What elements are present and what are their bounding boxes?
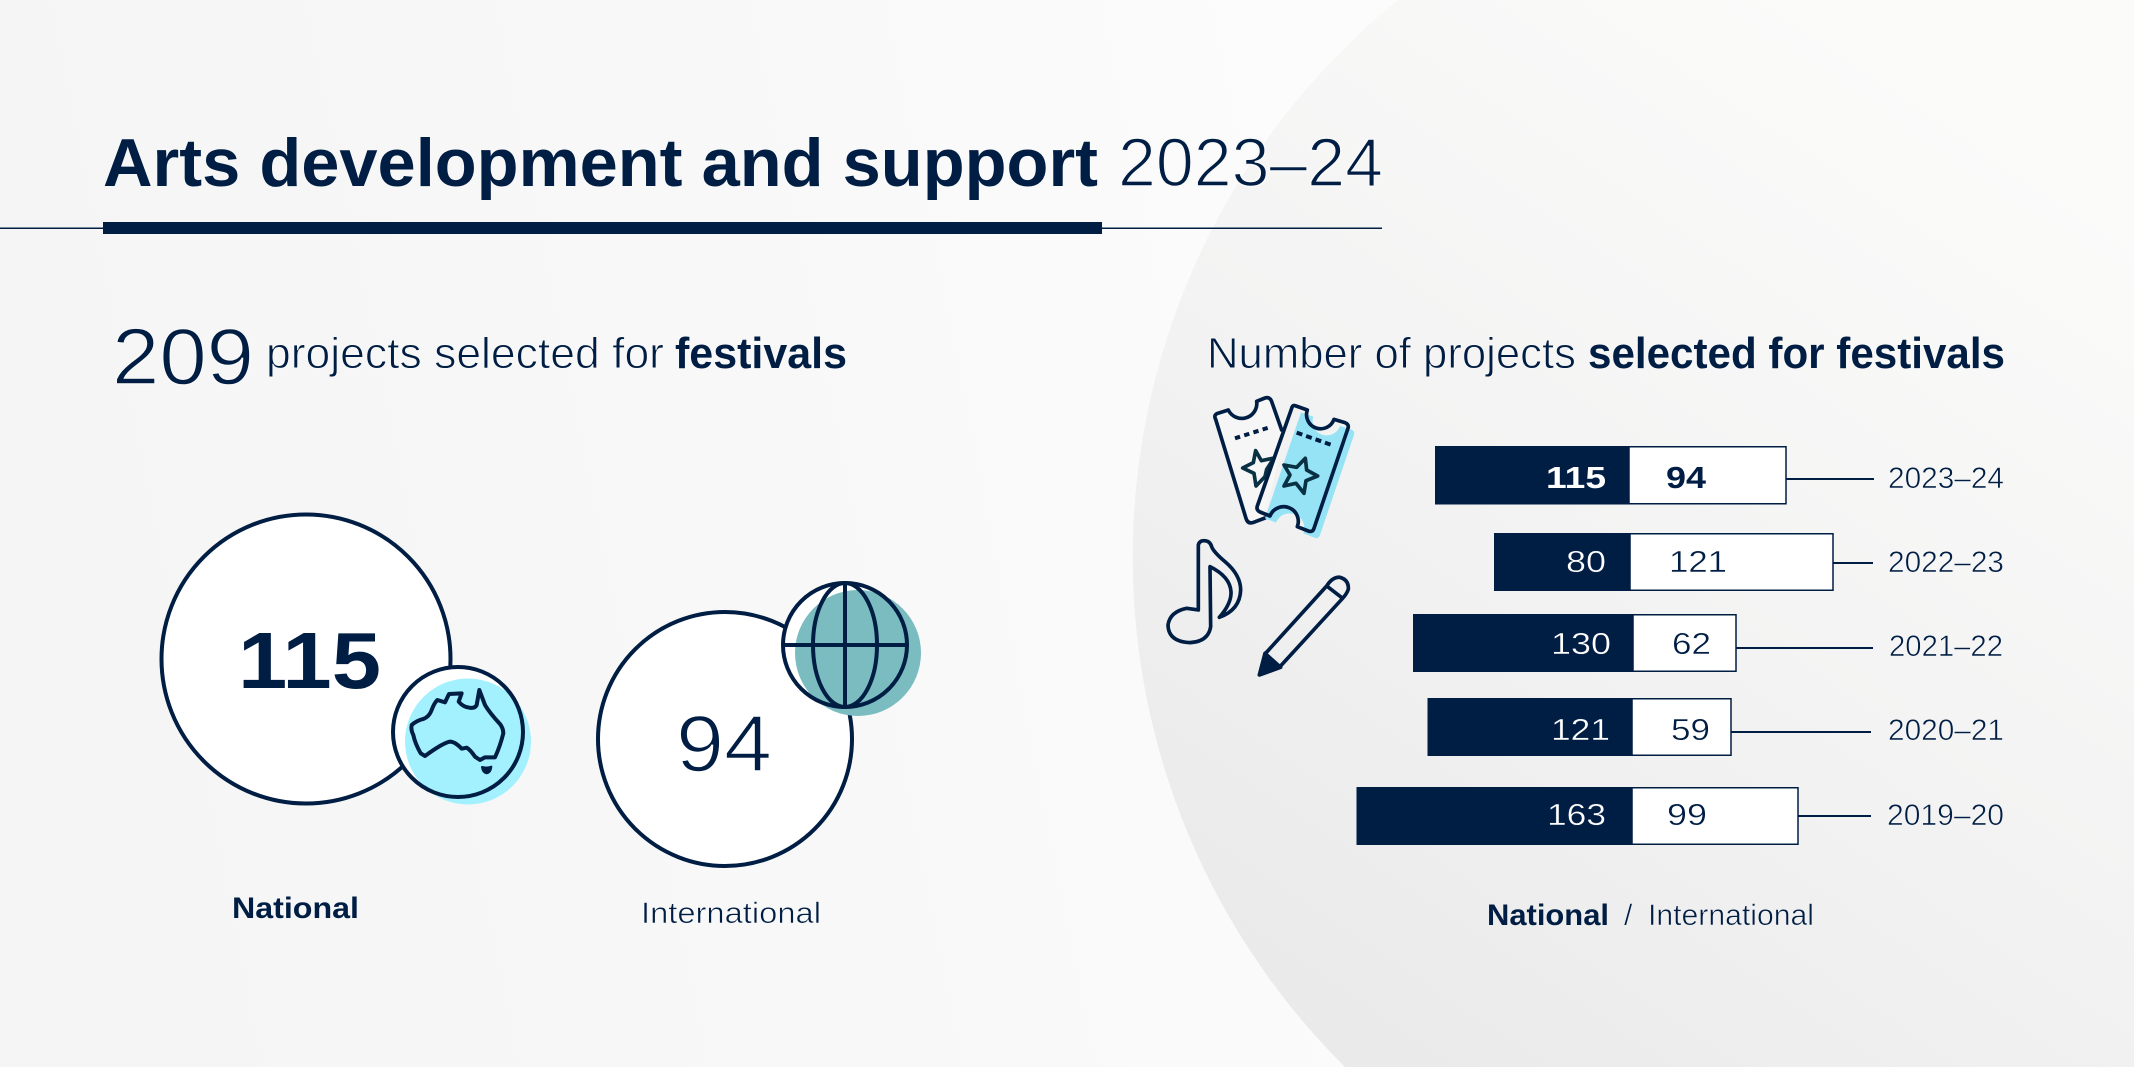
icon: globe — [783, 583, 921, 716]
icon: Australia map — [393, 667, 531, 804]
heading: 209 projects selected for festivals — [112, 312, 847, 401]
bar: 2020–21: 59 — [1671, 712, 1710, 747]
circle: national 115: 115 — [238, 616, 381, 705]
bar chart — [1356, 446, 2004, 845]
bar: 2019–20: 99 — [1667, 797, 1707, 832]
bar: 2020–21 — [1428, 698, 2004, 756]
bar: 2022–23: 80 — [1566, 544, 1606, 579]
panel: festival projects total and split — [112, 312, 921, 930]
bar: 2020–21: 121 — [1551, 712, 1610, 747]
bar: 2022–23: 2022–23 — [1888, 546, 2004, 579]
title: 2023–24 — [1118, 124, 1383, 201]
heading: 209 projects selected for festivals: 209 — [112, 312, 254, 401]
bar: 2021–22: 2021–22 — [1889, 630, 2003, 663]
bar: 2021–22: 130 — [1551, 626, 1611, 661]
icon: tickets — [1215, 398, 1354, 538]
icon: pencil — [1259, 577, 1348, 675]
heading: Number of projects selected for festivals: Number of projects — [1207, 329, 1576, 378]
legend: National / International: National — [1487, 899, 1609, 932]
bar: 2019–20: 2019–20 — [1887, 799, 2004, 832]
panel: number of projects chart — [1168, 329, 2005, 932]
label: National: National — [232, 892, 359, 925]
heading: Number of projects selected for festivals — [1207, 329, 2005, 378]
circle: national 115 — [162, 514, 450, 804]
legend: National / International — [1487, 899, 1814, 932]
title: Arts development and support — [103, 125, 1098, 201]
label: International: International — [641, 897, 821, 930]
bar: 2021–22: 62 — [1672, 626, 1711, 661]
bar: 2021–22 — [1413, 614, 2003, 672]
heading: 209 projects selected for festivals: projects selected for — [266, 329, 664, 378]
heading: 209 projects selected for festivals: festivals — [675, 329, 847, 378]
icon: music note — [1168, 541, 1241, 643]
circle: international 94 — [598, 612, 852, 866]
bar: 2023–24 — [1435, 446, 2004, 504]
legend: National / International: International — [1648, 899, 1814, 932]
bar: 2023–24: 2023–24 — [1888, 462, 2004, 495]
legend: National / International: / — [1624, 899, 1633, 932]
bar: 2019–20: 163 — [1547, 797, 1606, 832]
bar: 2022–23: 121 — [1669, 544, 1727, 579]
circle: international 94: 94 — [676, 699, 772, 788]
bar: 2019–20 — [1356, 787, 2004, 845]
bar: 2020–21: 2020–21 — [1888, 714, 2004, 747]
bar: 2023–24: 94 — [1666, 460, 1707, 495]
heading: Number of projects selected for festivals: selected for festivals — [1588, 329, 2005, 378]
bar: 2023–24: 115 — [1546, 460, 1606, 495]
title rule — [0, 222, 1382, 234]
bar: 2022–23 — [1494, 533, 2004, 591]
